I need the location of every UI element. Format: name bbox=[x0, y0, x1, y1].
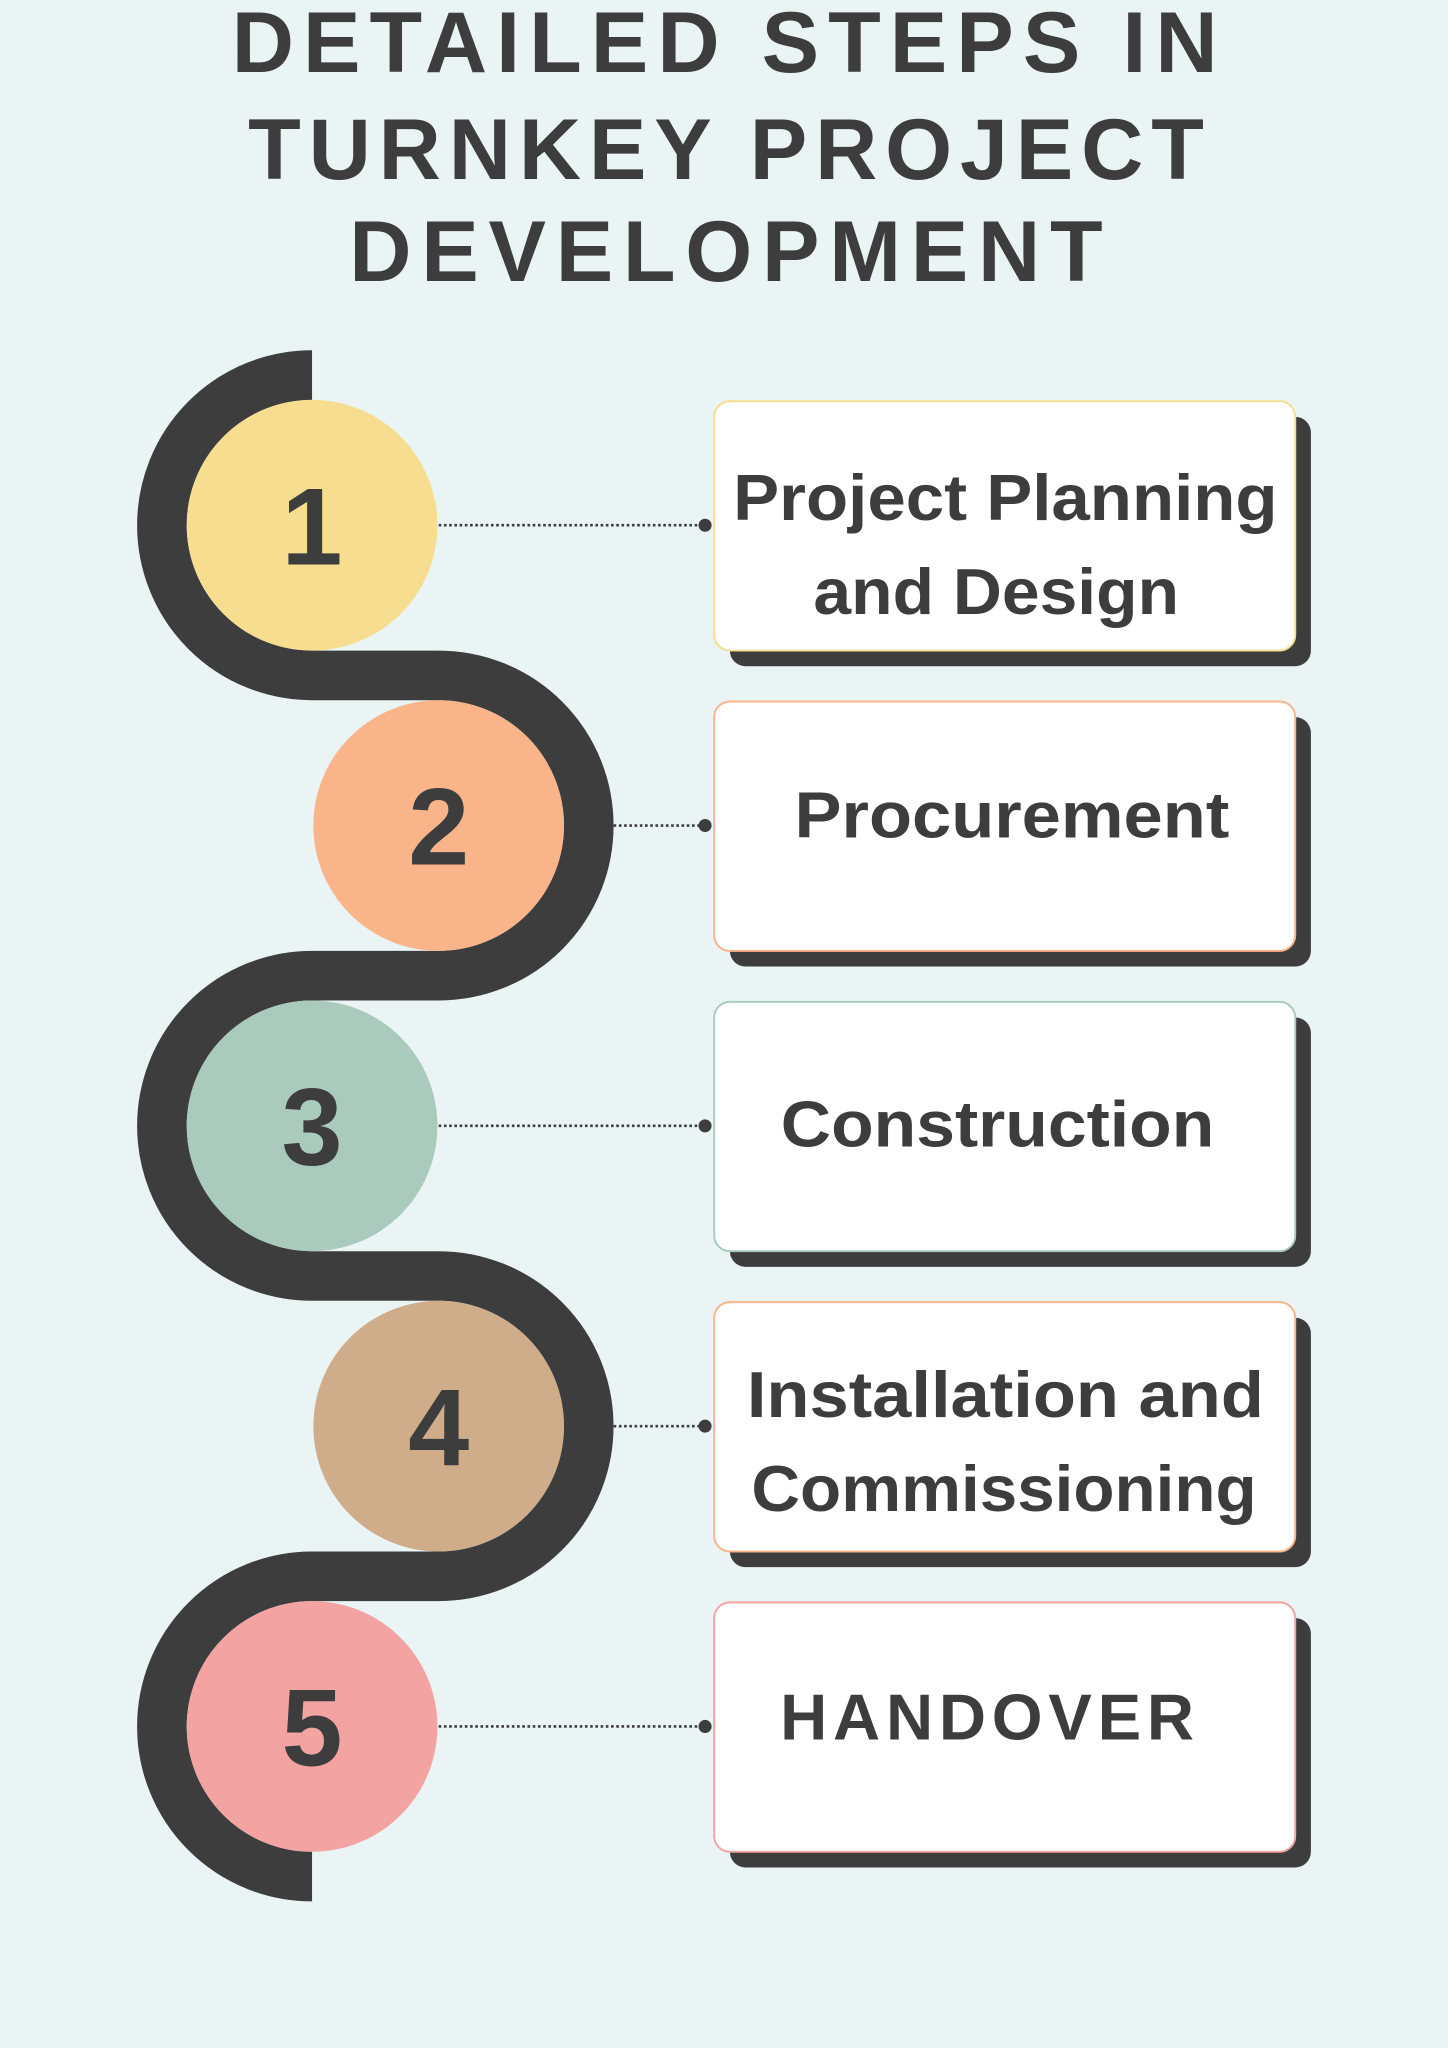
circle 3 bbox=[187, 1000, 437, 1251]
step 2 bbox=[313, 700, 1311, 967]
circle 3: 3 bbox=[282, 1067, 343, 1189]
step 1 bbox=[187, 400, 1311, 666]
circle 4 bbox=[313, 1301, 564, 1551]
connector 1 bbox=[439, 519, 712, 532]
box 1: and Design bbox=[813, 555, 1179, 628]
box 4: Commissioning bbox=[751, 1452, 1257, 1525]
box 5 bbox=[714, 1602, 1311, 1867]
box 2 bbox=[714, 701, 1311, 967]
box 3: Construction bbox=[781, 1088, 1214, 1161]
box 4 bbox=[714, 1302, 1311, 1567]
step 4 bbox=[313, 1301, 1311, 1567]
box 1: Project Planning bbox=[733, 461, 1278, 534]
step 3 bbox=[187, 1000, 1311, 1267]
title: TURNKEY PROJECT bbox=[248, 102, 1204, 198]
circle 5: 5 bbox=[282, 1668, 343, 1790]
box 3 bbox=[714, 1002, 1311, 1267]
step 5 bbox=[187, 1601, 1311, 1867]
title: DEVELOPMENT bbox=[349, 204, 1103, 300]
box 5: HANDOVER bbox=[780, 1681, 1194, 1754]
box 1 bbox=[714, 401, 1311, 666]
circle 5 bbox=[187, 1601, 437, 1852]
snake path bbox=[162, 375, 589, 1877]
circle 1: 1 bbox=[282, 466, 343, 588]
box 2: Procurement bbox=[795, 778, 1229, 851]
circle 2: 2 bbox=[408, 767, 469, 889]
box 4: Installation and bbox=[747, 1358, 1264, 1431]
connector 2 bbox=[614, 819, 712, 832]
circle 4: 4 bbox=[408, 1367, 469, 1489]
connector 5 bbox=[439, 1720, 712, 1733]
circle 1 bbox=[187, 400, 437, 651]
circle 2 bbox=[313, 700, 564, 951]
connector 4 bbox=[614, 1420, 712, 1433]
connector 3 bbox=[439, 1119, 712, 1132]
title bbox=[232, 0, 1218, 300]
